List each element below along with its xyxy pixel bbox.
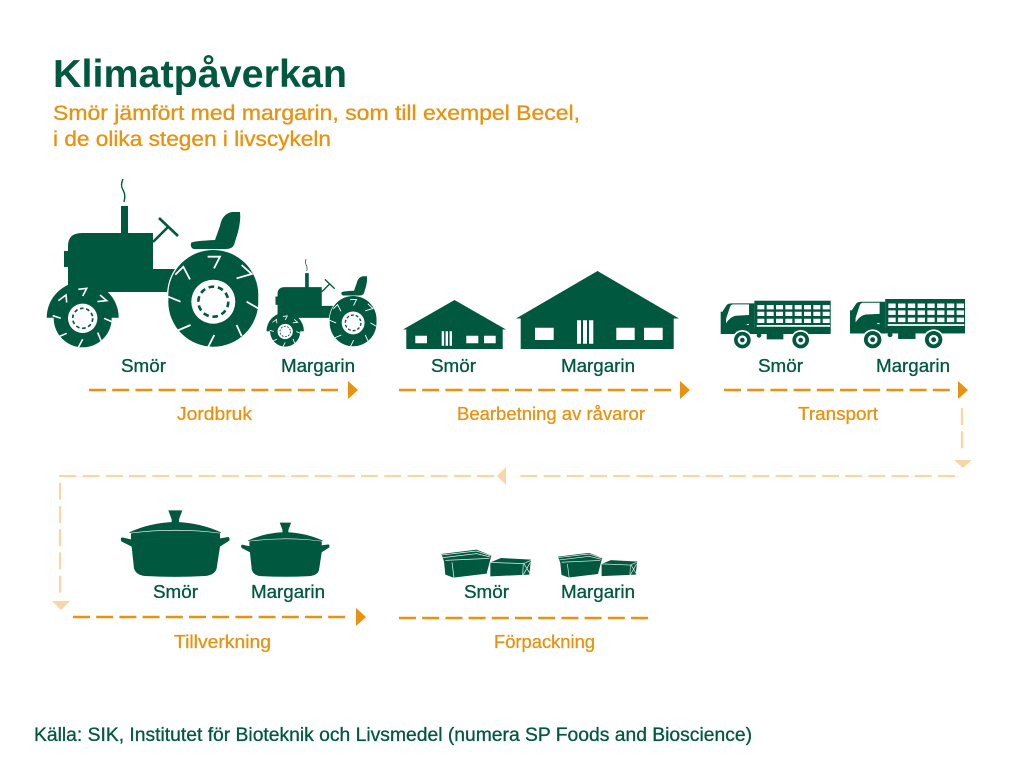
step heading: Transport [798, 404, 878, 424]
arrow [724, 381, 968, 399]
source: Källa: SIK, Institutet för Bioteknik och Livsmedel (numera SP Foods and Bioscience) [34, 725, 752, 746]
subtitle [53, 101, 580, 151]
icon: small tractor [266, 259, 377, 347]
step heading: Jordbruk [177, 404, 253, 424]
label: Smör: Smör [431, 356, 476, 376]
arrow [73, 608, 366, 626]
subtitle: i de olika stegen i livscykeln [53, 127, 331, 151]
label: Margarin: Margarin [561, 582, 635, 602]
icon: large truck [850, 299, 965, 350]
icon: large tractor [47, 179, 260, 347]
label: Margarin: Margarin [561, 356, 635, 376]
label: Smör: Smör [758, 356, 803, 376]
title: Klimatpåverkan [53, 53, 347, 96]
label: Smör: Smör [153, 582, 198, 602]
arrow [89, 381, 358, 399]
label: Margarin: Margarin [251, 582, 325, 602]
icon: small pot [241, 523, 329, 577]
divider line [399, 617, 648, 619]
label: Margarin: Margarin [281, 356, 355, 376]
icon: large building [516, 271, 679, 349]
icon: large pot [121, 510, 230, 577]
panel: Jordbruk [47, 179, 377, 424]
step heading: Förpackning [494, 632, 595, 652]
panel: Transport [721, 299, 968, 424]
icon: tub and block [558, 553, 637, 578]
arrow [399, 381, 690, 399]
label: Margarin: Margarin [876, 356, 950, 376]
step heading: Tillverkning [174, 632, 271, 652]
icon: tub and block [441, 550, 531, 578]
label: Smör: Smör [121, 356, 166, 376]
panel: Tillverkning [73, 510, 366, 652]
arrow: connector between rows [52, 408, 972, 610]
label: Smör: Smör [464, 582, 509, 602]
panel: Förpackning [399, 550, 648, 652]
step heading: Bearbetning av råvaror [457, 404, 645, 424]
icon: small truck [721, 301, 831, 350]
panel: Bearbetning av råvaror [399, 271, 690, 424]
subtitle: Smör jämfört med margarin, som till exempel Becel, [53, 101, 580, 125]
icon: small building [403, 300, 506, 349]
